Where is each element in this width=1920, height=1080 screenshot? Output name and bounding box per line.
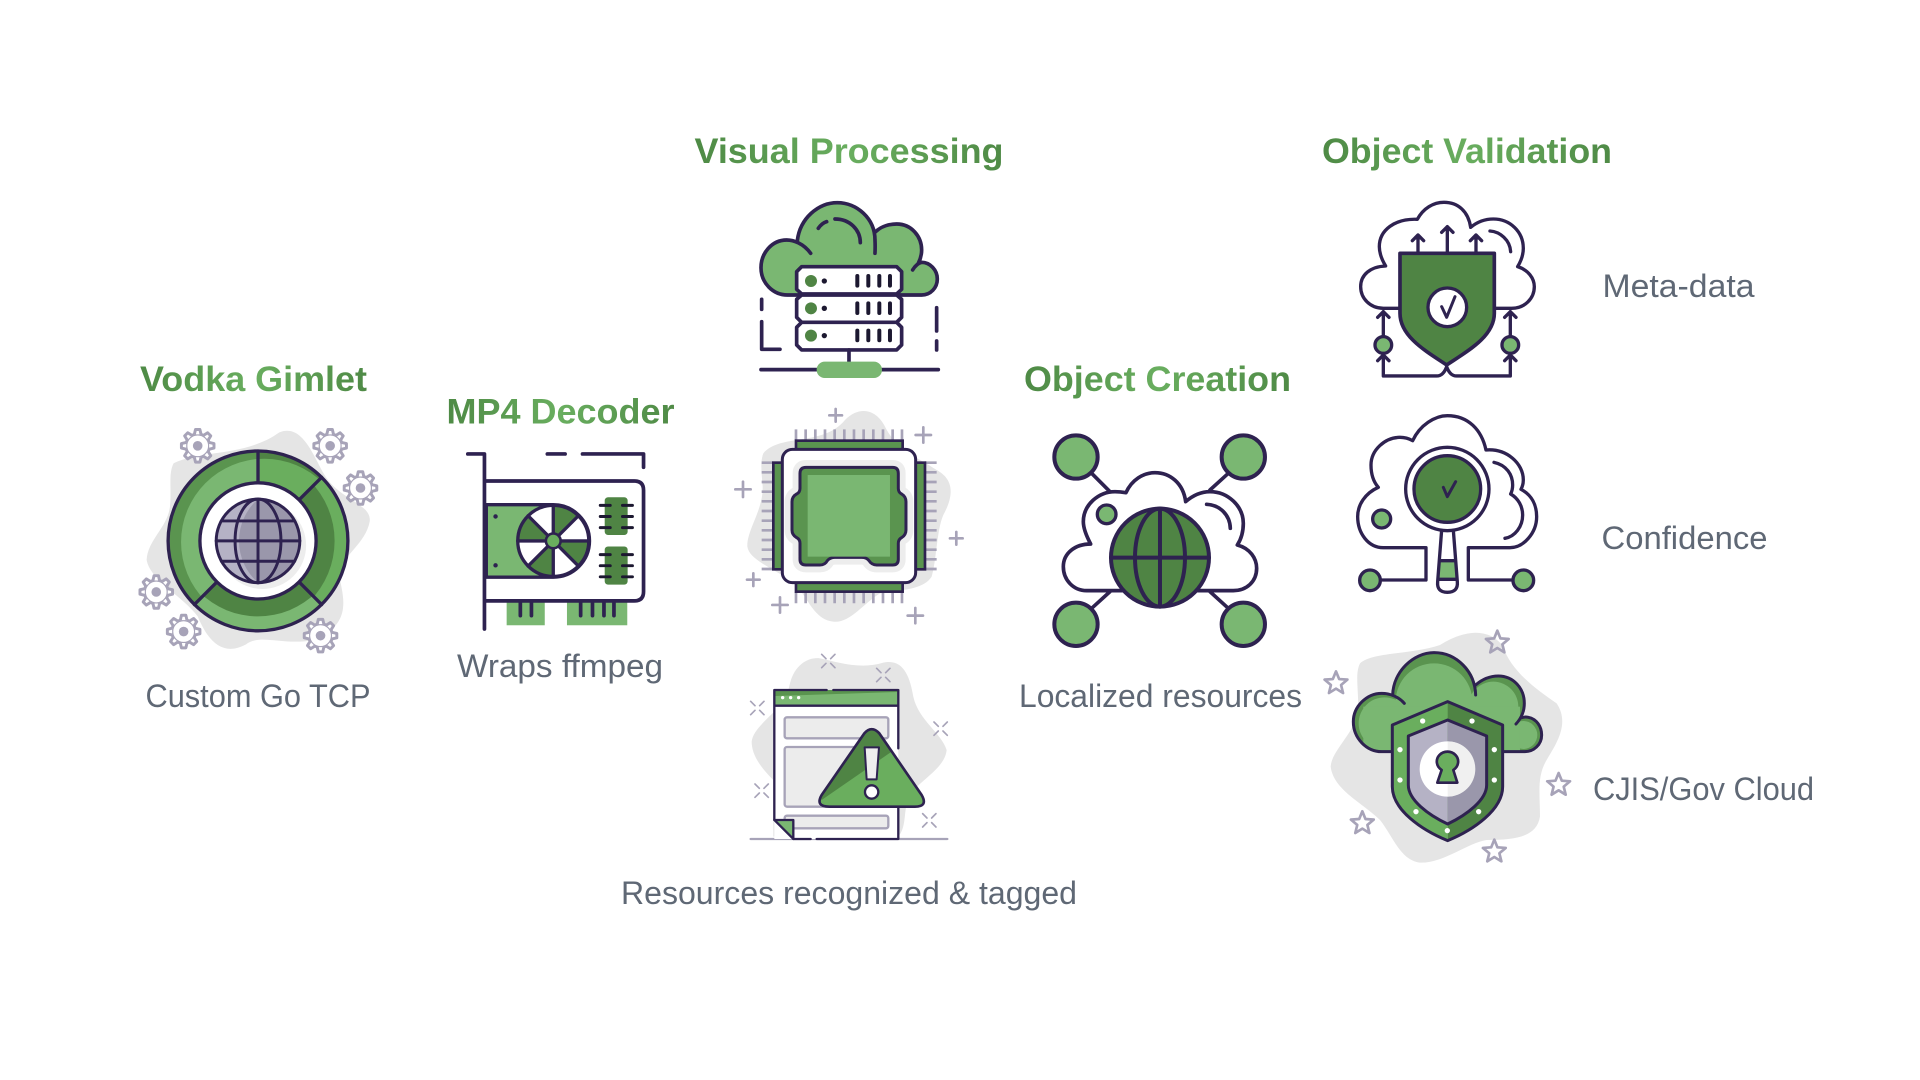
caption: Localized resources: Localized resources bbox=[1019, 678, 1302, 714]
heading: Object Creation: Object Creation bbox=[1024, 360, 1291, 399]
heading: Vodka Gimlet: Vodka Gimlet bbox=[140, 360, 367, 399]
caption: Custom Go TCP: Custom Go TCP bbox=[146, 678, 370, 714]
caption: Confidence: Confidence bbox=[1602, 520, 1768, 556]
icon: magnifier cloud bbox=[1358, 416, 1537, 592]
icon: processor chip bbox=[735, 409, 963, 623]
heading: Object Validation: Object Validation bbox=[1322, 132, 1612, 171]
caption: Wraps ffmpeg: Wraps ffmpeg bbox=[457, 648, 663, 684]
infographic canvas bbox=[138, 138, 1812, 910]
caption: Meta-data: Meta-data bbox=[1602, 268, 1755, 304]
icon: cloud network globe bbox=[1054, 435, 1265, 646]
icon: globe donut with gears bbox=[140, 430, 377, 652]
heading: Visual Processing: Visual Processing bbox=[694, 132, 1004, 171]
icon: cloud server bbox=[761, 203, 938, 378]
panel: Vodka Gimlet bbox=[140, 360, 377, 714]
panel: MP4 Decoder bbox=[446, 392, 675, 684]
caption: Resources recognized & tagged: Resources recognized & tagged bbox=[621, 875, 1077, 911]
icon: shield cloud bbox=[1361, 202, 1534, 376]
icon: document warning bbox=[751, 654, 947, 839]
icon: graphics card bbox=[468, 454, 644, 629]
caption: CJIS/Gov Cloud: CJIS/Gov Cloud bbox=[1593, 771, 1814, 807]
heading: MP4 Decoder: MP4 Decoder bbox=[446, 392, 675, 432]
panel: Visual Processing bbox=[621, 132, 1077, 911]
panel: Object Validation bbox=[1322, 132, 1814, 863]
panel: Object Creation bbox=[1019, 360, 1302, 714]
icon: secure cloud shield bbox=[1325, 631, 1570, 863]
